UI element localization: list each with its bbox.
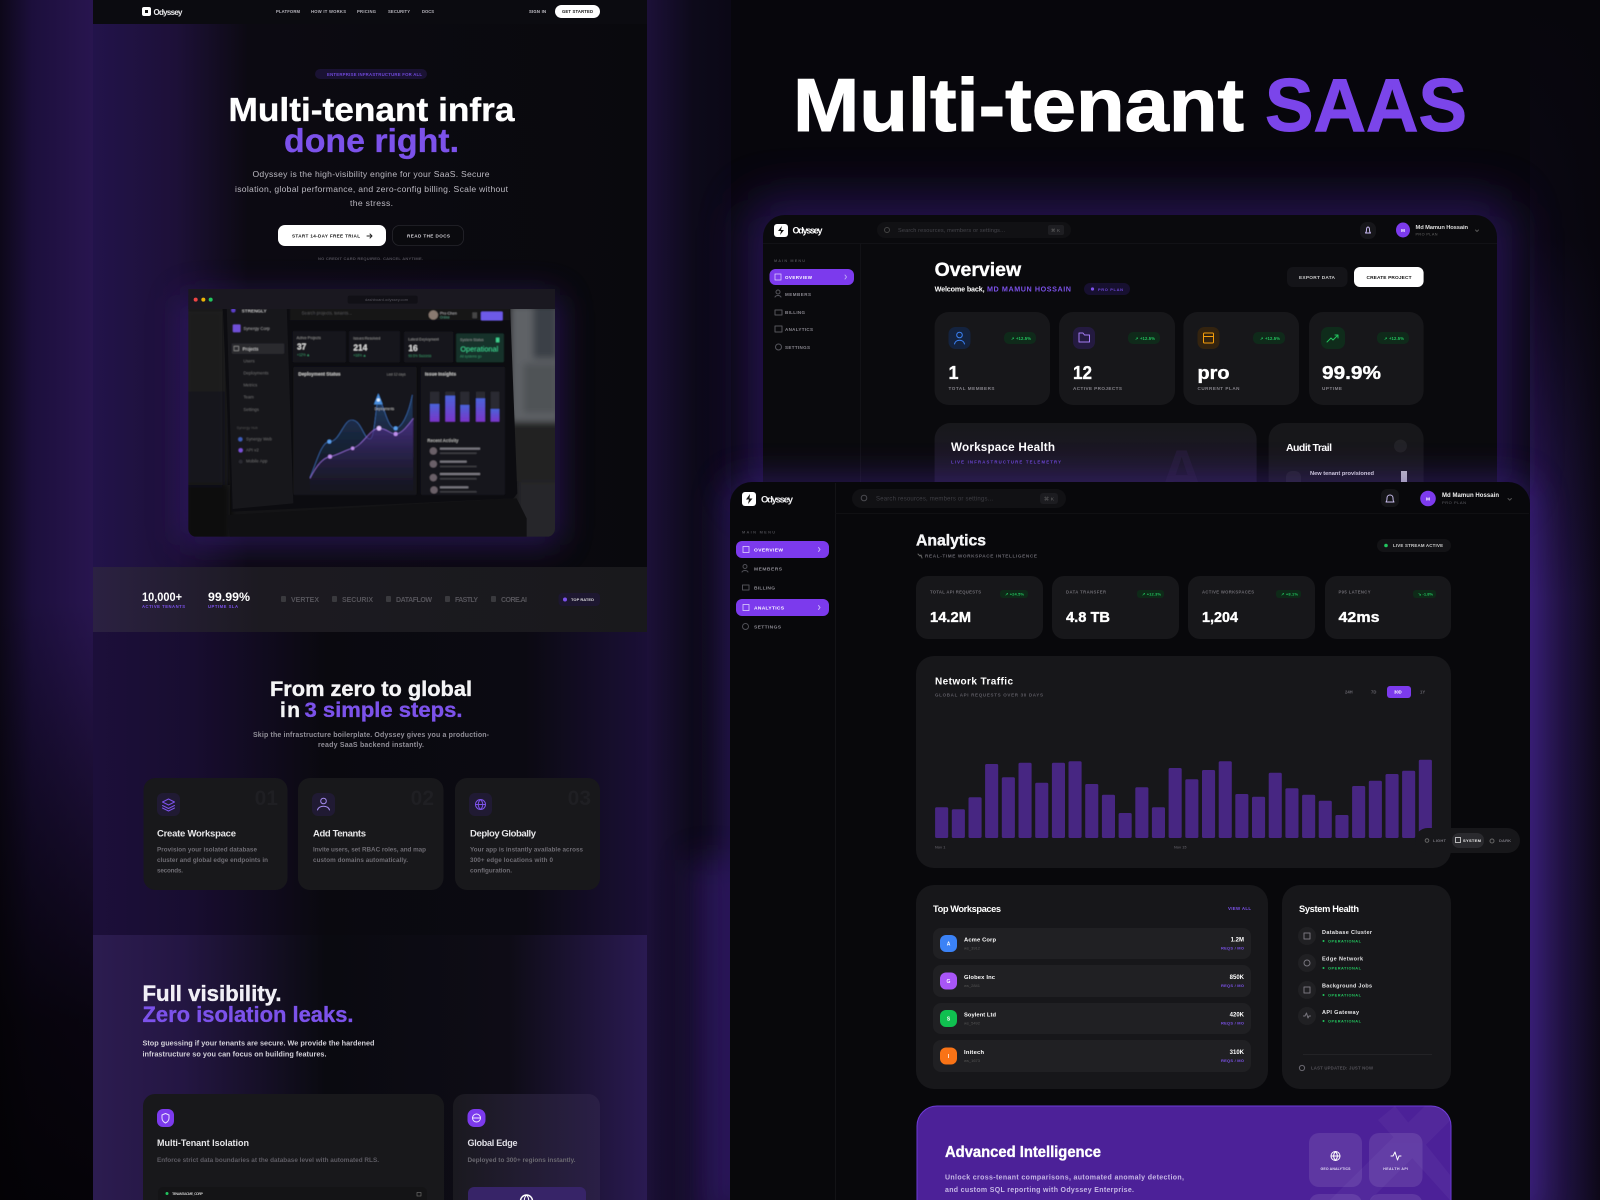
hero dashboard screenshot: Settings [243,407,259,412]
stat card: active projects: ↗ +12.5% [1135,336,1155,341]
theme toggle [1415,828,1520,853]
workspace row: initech [933,1040,1251,1072]
feature card: multi-tenant isolation [143,1094,444,1200]
tile: health api [1369,1133,1422,1187]
panel: top workspaces: Top Workspaces [933,904,1001,914]
workspace health card: Workspace Health [951,441,1055,454]
health item: edge network: Edge Network [1322,956,1364,962]
hero dashboard screenshot: 214 [353,342,368,352]
workspace row: globex inc: 850K [1230,975,1245,981]
hero dashboard screenshot: Projects [243,346,258,351]
health item: database cluster [1298,927,1373,945]
hero dashboard screenshot: Users [243,359,255,364]
overview page header: Welcome back, [935,284,985,294]
overview page header: PRO PLAN [1098,287,1123,292]
step card 3: deploy globally: 03 [568,787,591,810]
kpi: data transfer: 4.8 TB [1066,610,1110,626]
kpi: total api requests [916,576,1043,639]
stat card: current plan: CURRENT PLAN [1198,386,1240,391]
stat card: total members: TOTAL MEMBERS [948,386,994,391]
stat card: total members [935,312,1050,405]
sign in: SIGN IN [529,9,546,14]
workspace row: acme corp: Acme Corp [964,938,996,944]
step card 2: add tenants: 02 [411,787,434,810]
kpi: active workspaces: 1,204 [1202,610,1238,626]
heading: Multi-tenant SAAS: Multi-tenant [793,63,1244,147]
partner logos: VERTEX [291,597,319,604]
hero dashboard screenshot: Operational [460,344,499,353]
hero badge: ENTERPRISE INFRASTRUCTURE FOR ALL [327,72,422,77]
overview user menu: M [1401,228,1405,233]
analytics logo: Odyssey [761,494,794,506]
chart title: GLOBAL API REQUESTS OVER 30 DAYS [935,692,1043,698]
hero dashboard screenshot: Team [243,395,254,400]
stat card: current plan: pro [1198,363,1230,383]
audit trail card [1268,423,1424,482]
step card 1: create workspace: seconds. [157,868,183,874]
kpi: data transfer: ↗ +12.3% [1142,592,1161,596]
health item: api gateway [1298,1007,1362,1025]
feature card: multi-tenant isolation: Multi-Tenant Isolation [157,1138,249,1148]
global edge map preview [468,1187,586,1200]
kpi: active workspaces: ACTIVE WORKSPACES [1202,590,1254,594]
partner logos: CORE.AI [501,597,527,604]
stat: uptime [208,592,250,609]
hero dashboard screenshot: System Status [460,338,484,342]
workspace row: globex inc: Globex Inc [964,975,996,981]
hero dashboard screenshot: Active Projects [297,336,321,340]
hero dashboard screenshot: Metrics [243,383,257,388]
overview sidebar menu: OVERVIEW [785,275,813,280]
panel: top workspaces: VIEW ALL [1228,906,1251,911]
step card 2: add tenants: Add Tenants [313,828,366,840]
hero dashboard screenshot: Deployment Status [298,372,341,377]
tile: health api: HEALTH API [1383,1167,1408,1171]
chart axis labels: Nov 1 [935,846,945,850]
hero dashboard screenshot: Synergy Hub [237,426,258,430]
analytics user menu: Md Mamun Hossain [1442,493,1499,499]
hero heading: Multi-tenant infra [228,92,515,129]
step card 1: create workspace: Provision your isolated database [157,846,257,854]
step card 2: add tenants: custom domains automatically. [313,857,408,864]
hero dashboard screenshot: Mobile App [246,459,268,464]
health item: edge network [1298,954,1364,972]
features paragraph [142,1038,374,1058]
overview user menu: PRO PLAN [1416,232,1438,236]
hero dashboard screenshot: Issues Resolved [353,337,380,341]
step card 1: create workspace [144,778,288,890]
overview user menu: Md Mamun Hossain [1416,225,1468,231]
top rated badge: TOP RATED [571,597,594,602]
workspace row: initech: Initech [964,1050,984,1056]
stat card: uptime [1309,312,1424,405]
hero dashboard screenshot: Synergy Corp [243,326,270,331]
tile: geo analytics [1309,1133,1362,1187]
overview sidebar menu: SETTINGS [785,345,810,350]
top rated badge [558,593,600,606]
range tabs: 24H [1345,690,1353,694]
workspace row: globex inc: G [947,979,951,985]
nav links: PRICING [357,9,376,14]
workspace row: initech: I [948,1054,950,1060]
overview page header [935,260,1130,295]
workspace row: initech: ws_1673 [964,1058,981,1063]
steps paragraph [253,732,490,749]
hero dashboard screenshot: +18% ▲ [353,353,366,357]
overview page header: MD MAMUN HOSSAIN [987,284,1071,294]
hero paragraph: Odyssey is the high-visibility engine for your SaaS. Secure [252,169,490,179]
stat card: active projects: 12 [1073,363,1092,383]
chart axis labels [935,846,1186,850]
analytics sidebar menu: SETTINGS [754,624,782,630]
landing navigation bar [93,0,647,24]
hero dashboard screenshot: Recent Activity [427,438,459,443]
stat: uptime: 99.99% [208,592,250,604]
chart title [935,676,1043,698]
partner logos: FASTLY [455,597,478,604]
hero heading [228,92,515,160]
kpi: active workspaces [1188,576,1315,639]
panel: system health: System Health [1299,904,1359,914]
hero dashboard screenshot: Online [440,316,450,320]
secondary button: read docs: READ THE DOCS [407,234,450,238]
overview notification bell [1360,222,1376,239]
analytics page header: Analytics [916,532,986,550]
hero dashboard screenshot: API v2 [246,448,259,453]
hero small print: NO CREDIT CARD REQUIRED. CANCEL ANYTIME. [318,256,423,261]
overview sidebar menu: MAIN MENU [774,259,805,263]
hero dashboard screenshot: Deployments [243,371,269,376]
steps heading [270,678,472,722]
workspace row: acme corp: 1.2M [1231,938,1244,944]
hero dashboard screenshot: Pro Chen [440,310,457,315]
hero dashboard screenshot: dashboard.odyssey.com [365,297,409,302]
export data button [1287,267,1348,287]
step card 2: add tenants: Invite users, set RBAC roles, and map [313,846,426,854]
overview sidebar menu: ANALYTICS [785,327,813,332]
hero heading: done right. [284,123,459,160]
features heading: Full visibility. [142,981,282,1006]
analytics user menu: PRO PLAN [1442,500,1466,505]
workspace health card [934,423,1256,482]
analytics sidebar menu: OVERVIEW [754,548,783,554]
stat card: uptime: UPTIME [1322,386,1342,391]
overview sidebar menu: BILLING [785,310,805,315]
kpi: total api requests: 14.2M [930,610,971,626]
hero dashboard screenshot: Deployments [375,407,394,411]
workspace row: soylent ltd: ws_5492 [964,1020,981,1026]
hero dashboard screenshot: All systems go [460,354,482,358]
logo: Odyssey [154,8,183,17]
tile: geo analytics: GEO ANALYTICS [1320,1167,1351,1171]
partner logos: SECURIX [342,597,373,604]
get started button: GET STARTED [562,9,593,14]
feature card: multi-tenant isolation: Enforce strict data boundaries at the database level with automated RLS. [157,1157,379,1164]
panel: analytics dashboard window [730,482,1530,1200]
analytics sidebar menu: BILLING [754,586,775,592]
hero dashboard screenshot: Latest Deployment [408,337,439,341]
primary button: start trial [278,225,386,246]
stats and trusted logos bar [93,567,647,632]
health item: api gateway: OPERATIONAL [1328,1018,1362,1024]
step card 1: create workspace: Create Workspace [157,828,236,840]
stat card: total members: ↗ +12.5% [1011,336,1031,341]
kpi: p95 latency: 42ms [1338,610,1380,626]
workspace row: acme corp [933,928,1251,959]
workspace row: initech: REQS / MO [1221,1058,1244,1063]
audit trail card: New tenant provisioned [1310,471,1375,477]
workspace row: soylent ltd: 420K [1230,1012,1245,1018]
analytics sidebar menu: MEMBERS [754,566,783,572]
range tabs [1345,686,1425,698]
analytics page header [916,532,1037,559]
step card 3: deploy globally [455,778,600,890]
range tabs: 30D [1394,690,1402,694]
overview search bar: Search resources, members or settings... [898,228,1005,234]
hero dashboard screenshot: Search projects, tenants... [302,310,352,315]
workspace row: soylent ltd [933,1003,1251,1034]
live stream badge: LIVE STREAM ACTIVE [1393,543,1443,548]
hero dashboard screenshot [180,289,560,545]
banner paragraph: and custom SQL reporting with Odyssey Enterprise. [945,1187,1134,1194]
kpi: total api requests: ↗ +24.5% [1005,592,1024,596]
kpi: p95 latency: ↘ -1.8% [1418,592,1433,596]
hero dashboard screenshot: Last 12 days [387,373,406,377]
steps paragraph: ready SaaS backend instantly. [318,742,424,749]
range tabs: 7D [1371,690,1376,694]
workspace health card: LIVE INFRASTRUCTURE TELEMETRY [951,460,1061,464]
features paragraph: Stop guessing if your tenants are secure. We provide the hardened [142,1038,374,1048]
stat: active tenants: ACTIVE TENANTS [142,604,185,609]
hero paragraph: the stress. [350,198,393,208]
features heading [142,981,354,1027]
workspace row: initech: 310K [1230,1050,1245,1056]
overview search bar: ⌘ K [1051,228,1060,233]
step card 3: deploy globally: Deploy Globally [470,828,537,840]
create project button: CREATE PROJECT [1366,275,1412,281]
nav links: HOW IT WORKS [311,9,346,14]
stat card: active projects [1059,312,1175,405]
workspace row: globex inc [933,965,1251,997]
tenant code box: TENANT: ACME_CORP [172,1192,203,1196]
live stream badge [1377,539,1451,552]
workspace row: acme corp: ws_3912 [964,946,981,950]
analytics user menu [1420,491,1511,506]
overview search bar [884,225,1064,235]
stat card: current plan [1183,312,1299,405]
overview page header: Overview [935,260,1021,281]
partner logos [281,596,527,604]
stat card: uptime: 99.9% [1322,363,1381,383]
create project button [1354,267,1424,287]
nav links: SECURITY [388,9,410,14]
tenant code box [158,1187,427,1200]
kpi: p95 latency [1325,576,1451,639]
chart title: Network Traffic [935,676,1013,688]
lower tiles [1309,1194,1422,1200]
heading: Multi-tenant SAAS [793,63,1467,147]
glow behind analytics window [722,476,1538,1200]
overview sidebar menu: MEMBERS [785,292,811,297]
hero paragraph [235,169,509,208]
primary button: start trial: START 14-DAY FREE TRIAL [292,234,360,238]
theme toggle: SYSTEM [1463,838,1482,843]
analytics logo [742,492,794,506]
nav links [276,9,434,14]
banner heading: Advanced Intelligence [945,1144,1101,1161]
hero dashboard screenshot: 37 [297,341,307,351]
panel: top workspaces [916,885,1268,1089]
health item: background jobs [1298,981,1372,999]
kpi: total api requests: TOTAL API REQUESTS [930,590,981,594]
chart axis labels: Nov 15 [1174,846,1186,850]
theme toggle: LIGHT [1433,838,1447,843]
panel: advanced intelligence banner [917,1106,1465,1200]
banner paragraph [945,1174,1184,1194]
step card 2: add tenants [298,778,444,890]
features heading: Zero isolation leaks. [142,1002,354,1027]
health item: background jobs: OPERATIONAL [1328,992,1362,998]
stat card: uptime: ↗ +12.5% [1384,336,1404,341]
nav links: DOCS [422,9,434,14]
workspace row: acme corp: A [947,942,951,948]
overview logo [774,224,822,237]
feature card: global edge: Global Edge [468,1138,518,1148]
hero dashboard screenshot: Issue Insights [425,372,456,377]
feature card: global edge: Deployed to 300+ regions instantly. [468,1157,576,1164]
health item: database cluster: OPERATIONAL [1328,938,1362,944]
logo [142,7,183,17]
analytics page header: REAL-TIME WORKSPACE INTELLIGENCE [925,554,1037,559]
heading: Multi-tenant SAAS: SAAS [1265,63,1467,147]
hero dashboard screenshot: +12% ▲ [297,353,310,357]
hero dashboard screenshot: 99.5% Success [408,354,432,358]
nav links: PLATFORM [276,9,300,14]
hero paragraph: isolation, global performance, and zero-config billing. Scale without [235,184,509,194]
overview logo: Odyssey [792,226,822,236]
last updated note: LAST UPDATED: JUST NOW [1311,1066,1374,1070]
partner logos: DATAFLOW [396,597,432,604]
hero dashboard screenshot: 16 [408,343,418,353]
analytics search bar: Search resources, members or settings... [876,496,993,502]
workspace health card: A [1160,438,1203,505]
analytics sidebar menu: MAIN MENU [742,530,775,534]
stat: active tenants [142,592,185,609]
stat: uptime: UPTIME SLA [208,604,238,609]
step card 1: create workspace: 01 [255,787,278,810]
stat card: current plan: ↗ +12.5% [1260,336,1280,341]
feature card: global edge [453,1094,600,1200]
steps paragraph: Skip the infrastructure boilerplate. Odyssey gives you a production- [253,732,490,739]
steps heading: 3 simple steps. [304,699,462,722]
kpi: p95 latency: P95 LATENCY [1338,590,1371,594]
health item: database cluster: Database Cluster [1322,930,1373,936]
secondary button: read docs [392,226,464,246]
health item: api gateway: API Gateway [1322,1010,1360,1016]
panel: landing page mockup [93,0,647,1200]
kpi: data transfer: DATA TRANSFER [1066,590,1106,594]
hero dashboard screenshot: Synergy Web [246,437,272,442]
export data button: EXPORT DATA [1299,275,1336,281]
step card 3: deploy globally: Your app is instantly available across [470,846,583,854]
panel: network traffic chart [916,656,1451,868]
health item: edge network: OPERATIONAL [1328,966,1362,970]
kpi: active workspaces: ↗ +8.1% [1281,592,1298,596]
panel background: landing page sections [93,0,647,1200]
workspace row: globex inc: REQS / MO [1221,983,1244,988]
stat card: total members: 1 [948,363,959,383]
analytics notification bell [1381,489,1399,507]
workspace row: globex inc: ws_2841 [964,983,981,988]
banner paragraph: Unlock cross-tenant comparisons, automated anomaly detection, [945,1174,1184,1182]
analytics user menu: M [1426,496,1430,502]
workspace row: acme corp: REQS / MO [1221,946,1244,950]
steps heading: in [280,699,300,722]
panel: system health [1282,885,1451,1089]
workspace row: soylent ltd: REQS / MO [1221,1020,1244,1026]
kpi: data transfer [1052,576,1179,639]
audit trail card: Audit Trail [1286,442,1332,454]
workspace row: soylent ltd: S [947,1016,951,1022]
stat: active tenants: 10,000+ [142,592,182,604]
get started button [555,5,600,18]
bar chart [935,760,1432,838]
theme toggle: DARK [1499,838,1511,843]
steps heading: From zero to global [270,678,472,701]
step card 1: create workspace: cluster and global edge endpoints in [157,857,268,864]
panel: overview dashboard window [763,215,1497,482]
health item: background jobs: Background Jobs [1322,984,1372,990]
range tabs: 1Y [1420,690,1425,694]
features paragraph: infrastructure so you can focus on building features. [142,1050,326,1058]
analytics search bar: ⌘ K [1044,496,1055,502]
overview sidebar menu [770,259,854,350]
analytics search bar [852,489,1066,508]
overview user menu [1396,222,1478,238]
analytics sidebar menu: ANALYTICS [754,606,785,612]
hero badge [315,69,427,79]
workspace row: soylent ltd: Soylent Ltd [964,1012,996,1018]
step card 3: deploy globally: configuration. [470,868,512,874]
analytics sidebar menu [736,530,829,630]
hero dashboard screenshot: STRENGLY [242,308,267,313]
step card 3: deploy globally: 300+ edge locations with 0 [470,857,553,864]
stat card: active projects: ACTIVE PROJECTS [1073,386,1122,391]
